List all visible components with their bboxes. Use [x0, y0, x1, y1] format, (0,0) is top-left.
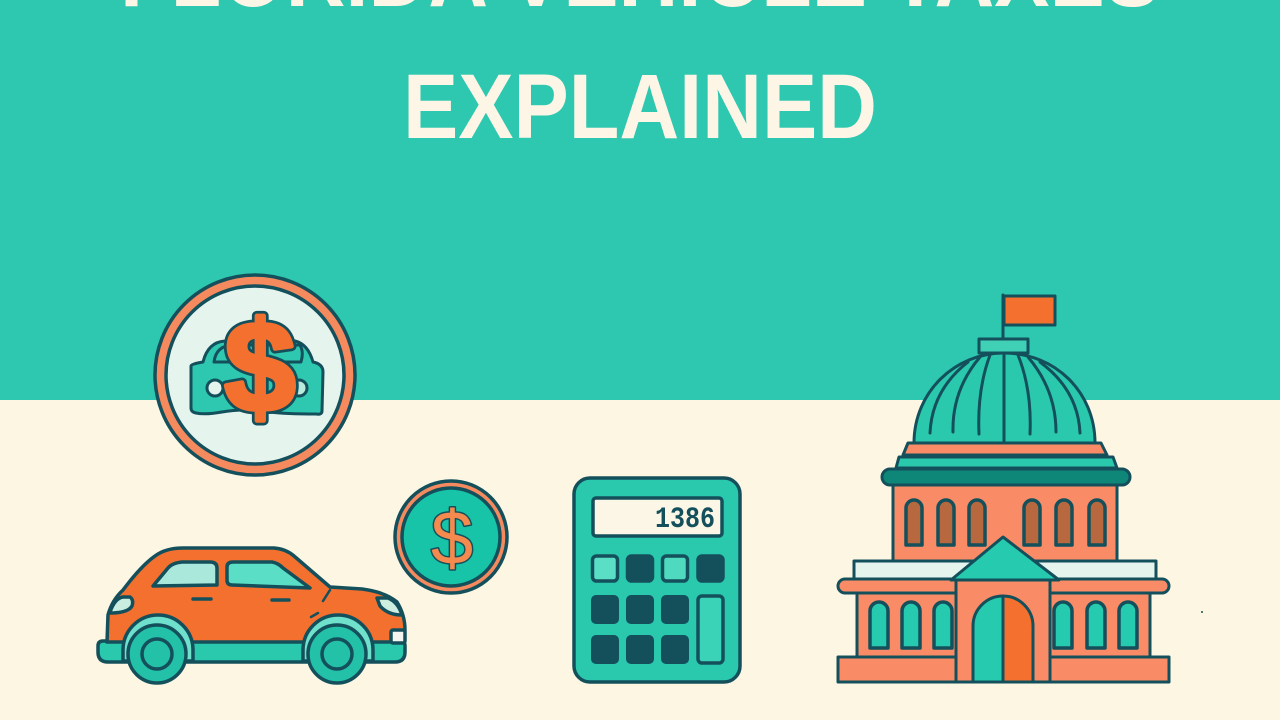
salmon drum band	[903, 443, 1107, 455]
hood seam	[311, 590, 330, 617]
calculator body	[574, 478, 740, 682]
grille	[391, 630, 405, 643]
lower building wings	[857, 592, 1150, 657]
rear wheel	[128, 625, 186, 683]
icon: large coin with car and dollar sign	[155, 275, 355, 475]
rear hub	[142, 639, 172, 669]
headlight	[377, 598, 402, 615]
front wheel arch	[303, 615, 373, 661]
calculator tall button	[698, 596, 723, 663]
front wheel	[308, 625, 366, 683]
dollar sign: $	[224, 296, 296, 439]
cupola	[979, 339, 1028, 353]
lower windows	[870, 602, 1137, 648]
icon: calculator	[574, 478, 740, 682]
right headlight	[291, 380, 307, 396]
speck near right edge	[1201, 611, 1203, 613]
wing cornice	[838, 579, 1169, 593]
upper building body	[893, 484, 1117, 562]
dome ribs	[930, 354, 1080, 443]
calculator screen	[593, 498, 722, 536]
dollar sign: $	[224, 296, 296, 439]
flag	[1004, 296, 1055, 325]
rear window	[153, 562, 217, 586]
icon: small dollar coin	[395, 481, 507, 593]
front window	[227, 562, 310, 588]
background: teal upper band	[0, 0, 1280, 400]
door left half	[973, 596, 1003, 682]
title	[120, 0, 1160, 158]
coin face	[166, 286, 344, 464]
small coin face	[402, 488, 500, 586]
dark teal cornice	[882, 469, 1130, 485]
door handles	[193, 599, 289, 600]
car sill	[98, 641, 405, 662]
small coin ring	[395, 481, 507, 593]
small dollar sign: $	[431, 496, 473, 581]
car windshield	[214, 345, 302, 362]
building base	[838, 657, 1169, 682]
title line 2: EXPLAINED	[403, 56, 877, 158]
upper windows	[906, 500, 1105, 545]
icon: capitol building	[838, 295, 1169, 682]
front-view car	[191, 341, 323, 414]
calculator buttons row 3	[592, 636, 688, 663]
door right half	[1003, 596, 1033, 682]
tail light	[110, 597, 133, 613]
teal drum band	[896, 457, 1117, 468]
icon: orange car	[98, 548, 405, 683]
calculator display number: 1386	[655, 503, 715, 537]
dome	[914, 353, 1095, 443]
calculator buttons row 2	[592, 596, 688, 623]
central portico	[956, 580, 1050, 682]
white attic band	[854, 561, 1156, 579]
rear wheel arch	[123, 615, 193, 661]
pediment	[951, 537, 1059, 580]
flag pole	[1002, 295, 1004, 340]
coin ring	[155, 275, 355, 475]
left headlight	[207, 380, 223, 396]
car body	[107, 548, 405, 642]
calculator buttons row 1	[592, 556, 723, 581]
front hub	[322, 639, 352, 669]
